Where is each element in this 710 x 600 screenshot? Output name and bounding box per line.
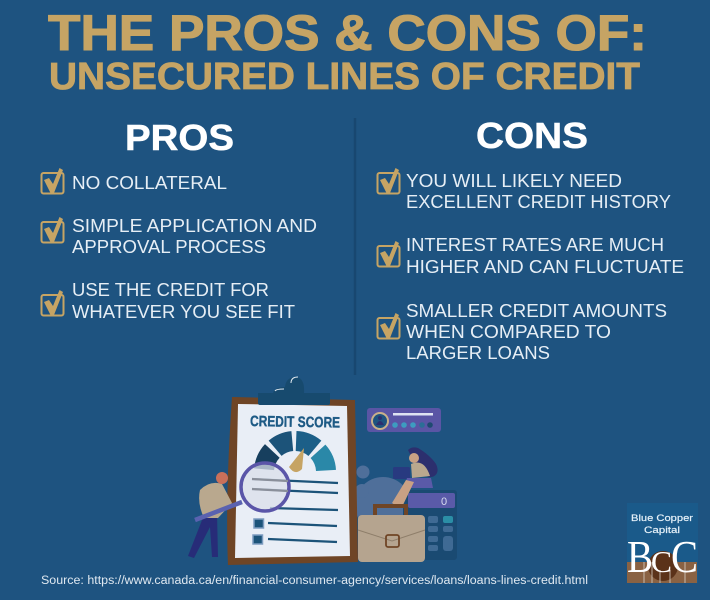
heading: cons: CONS: [476, 115, 588, 156]
logo mark: B: [627, 532, 653, 582]
con item: interest rates: INTEREST RATES ARE MUCH: [406, 234, 664, 255]
con item: smaller amounts: LARGER LOANS: [406, 342, 550, 363]
illustration: credit score scene: [188, 377, 457, 565]
con item: credit history: [378, 168, 671, 212]
pro item: use the credit: WHATEVER YOU SEE FIT: [72, 301, 295, 322]
icon: clipboard: [227, 377, 358, 565]
clipboard heading: CREDIT SCORE: [250, 413, 340, 432]
pro item: no collateral: NO COLLATERAL: [72, 172, 227, 193]
con item: interest rates: HIGHER AND CAN FLUCTUATE: [406, 256, 684, 277]
gauge needle: [289, 448, 304, 472]
panel: pros: [42, 117, 317, 322]
center divider: [354, 118, 356, 375]
logo: Blue Copper Capital: Capital: [644, 525, 680, 536]
icon: calculator: 0: [441, 496, 447, 508]
logo: Blue Copper Capital: [627, 503, 698, 583]
pro item: simple application: [42, 215, 317, 257]
pro item: simple application: SIMPLE APPLICATION AND: [72, 215, 317, 236]
heading: pros: PROS: [125, 117, 234, 158]
gauge: [264, 441, 326, 470]
icon: woman on calculator with laptop: [375, 447, 438, 515]
pro item: simple application: APPROVAL PROCESS: [72, 236, 266, 257]
logo mark: C: [671, 532, 698, 582]
title: UNSECURED LINES OF CREDIT: [49, 56, 640, 98]
pro item: use the credit: USE THE CREDIT FOR: [72, 279, 269, 300]
icon: gears: [355, 466, 411, 533]
icon: profile rating card: [367, 408, 441, 432]
pro item: no collateral: [42, 168, 227, 194]
title: [48, 5, 647, 98]
clipboard clip: [258, 377, 330, 405]
title: THE PROS & CONS OF:: [48, 5, 647, 61]
con item: interest rates: [378, 234, 684, 277]
icon: man with magnifier: [188, 463, 289, 558]
icon: briefcase: [358, 515, 425, 562]
con item: smaller amounts: SMALLER CREDIT AMOUNTS: [406, 300, 667, 321]
icon: calculator: [403, 490, 457, 560]
con item: credit history: YOU WILL LIKELY NEED: [406, 170, 622, 191]
logo mark: [627, 532, 698, 583]
con item: smaller amounts: [378, 300, 667, 363]
logo mark: C: [651, 544, 672, 579]
pro item: use the credit: [42, 279, 295, 322]
logo text: Blue Copper: [631, 513, 693, 524]
panel: cons: [378, 115, 684, 363]
report checkboxes: [253, 519, 264, 544]
report lines: [252, 479, 338, 542]
source line: Source: https://www.canada.ca/en/financial-consumer-agency/services/loans/loans-lines-credit.html: [41, 575, 588, 587]
con item: smaller amounts: WHEN COMPARED TO: [406, 321, 611, 342]
con item: credit history: EXCELLENT CREDIT HISTORY: [406, 191, 671, 212]
magnifier: [241, 463, 289, 511]
